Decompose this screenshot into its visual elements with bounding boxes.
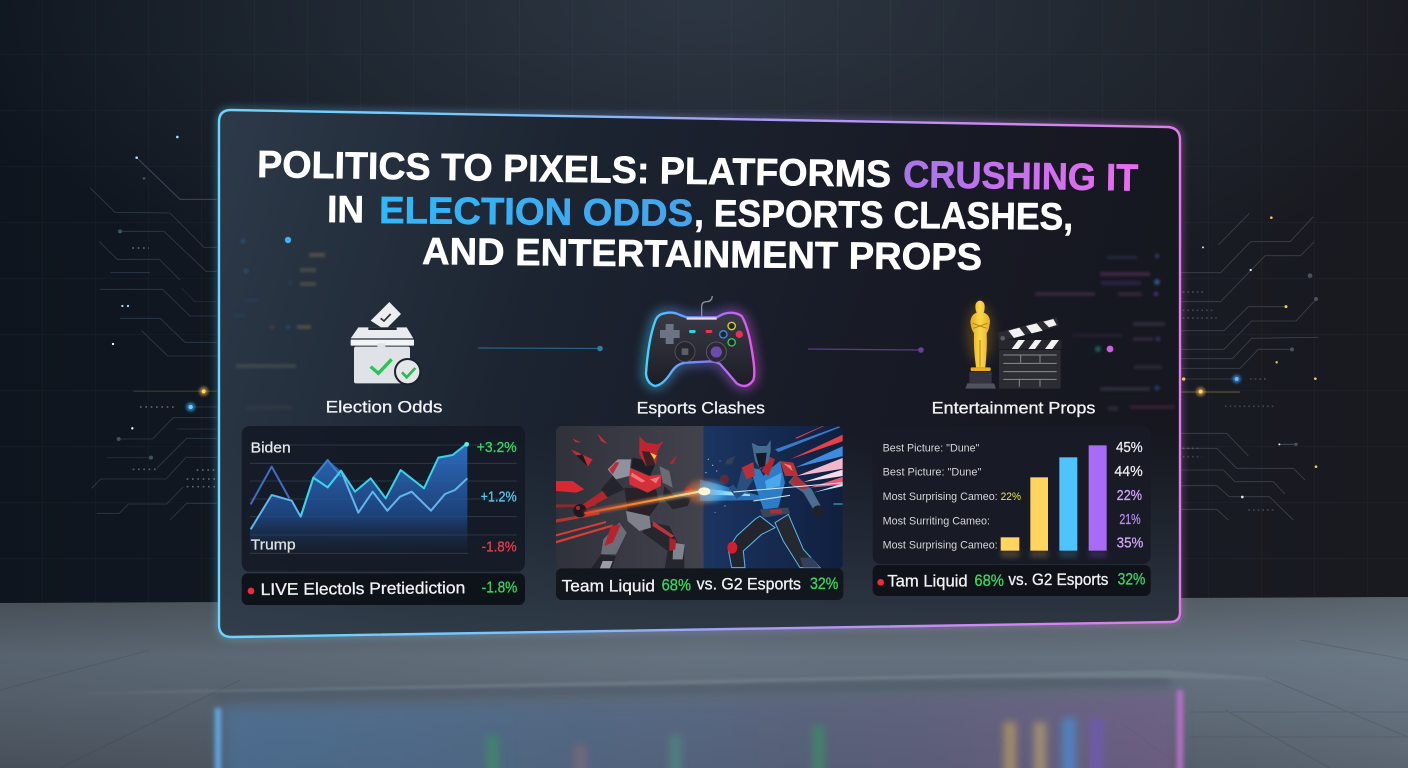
live prediction strip: LIVE Electols Pretiediction bbox=[261, 578, 465, 599]
title: AND ENTERTAINMENT PROPS bbox=[422, 231, 982, 279]
arrow: election to esports bbox=[478, 346, 603, 351]
matchup strip bbox=[873, 565, 1151, 596]
percent values: 44% bbox=[1114, 463, 1143, 480]
right circuit decoration bbox=[1181, 213, 1318, 520]
label: election odds: Election Odds bbox=[326, 397, 442, 416]
matchup strip: vs. G2 Esports bbox=[697, 575, 801, 594]
white trails over body bbox=[733, 483, 843, 501]
label: esports clashes: Esports Clashes bbox=[637, 398, 765, 417]
matchup strip bbox=[556, 568, 843, 600]
battle illustration bbox=[556, 426, 843, 571]
main glass panel bbox=[219, 110, 1180, 637]
line chart panel: -1.8% bbox=[482, 539, 517, 556]
percent values: 22% bbox=[1117, 487, 1142, 504]
row labels: Most Surprising Cameo: bbox=[883, 539, 998, 551]
label: entertainment props: Entertainment Props bbox=[932, 398, 1095, 417]
row labels: Most Surriting Cameo: bbox=[883, 515, 990, 527]
live prediction strip bbox=[242, 573, 525, 605]
pelvis bbox=[626, 511, 651, 531]
title bbox=[257, 144, 1138, 279]
belt bbox=[760, 508, 790, 518]
magenta and teal dots bbox=[1095, 346, 1113, 352]
left circuit decoration bbox=[90, 136, 217, 520]
row labels: Most Surprising Cameo: bbox=[883, 491, 998, 503]
icon: clapperboard bbox=[997, 317, 1062, 389]
line chart panel: +1.2% bbox=[481, 489, 517, 506]
speed trails bbox=[775, 426, 843, 505]
matchup strip: 68% bbox=[662, 576, 691, 595]
icon: ballot box bbox=[351, 302, 420, 384]
legs bbox=[728, 516, 775, 568]
blurred interior data, right bbox=[1035, 254, 1175, 411]
red fighter side bbox=[556, 433, 693, 571]
helmet bbox=[639, 436, 663, 466]
title: ELECTION ODDS bbox=[379, 190, 693, 235]
title: IN bbox=[327, 189, 364, 231]
row labels: Best Picture: "Dune" bbox=[883, 442, 980, 454]
panel glow bbox=[219, 110, 1180, 637]
blurred interior data, left bbox=[234, 238, 326, 368]
reflective floor bbox=[0, 597, 1408, 768]
blue fighter side bbox=[700, 426, 843, 568]
title: POLITICS TO PIXELS: PLATFORMS bbox=[257, 144, 891, 196]
percent changes: +3.2% bbox=[477, 439, 517, 456]
torso bbox=[750, 461, 785, 509]
row labels bbox=[883, 442, 1021, 551]
matchup strip: 68% bbox=[974, 571, 1004, 590]
column: entertainment props bbox=[873, 301, 1151, 596]
row labels: Best Picture: "Dune" bbox=[883, 466, 982, 478]
title: CRUSHING IT bbox=[903, 154, 1138, 200]
background wall bbox=[0, 0, 1408, 606]
candidate labels: Biden bbox=[251, 440, 291, 456]
right arm bbox=[788, 474, 822, 509]
legs bbox=[601, 523, 627, 554]
arrow: esports to entertainment bbox=[808, 347, 924, 353]
left arm bbox=[728, 469, 753, 499]
energy rays bbox=[700, 456, 767, 513]
row labels: 22% bbox=[1001, 491, 1021, 503]
matchup strip: 32% bbox=[1118, 569, 1145, 588]
title: , ESPORTS CLASHES, bbox=[694, 193, 1073, 239]
live prediction strip: -1.8% bbox=[482, 580, 518, 597]
bar chart panel bbox=[873, 426, 1151, 564]
head bbox=[752, 440, 771, 469]
chart lines bbox=[251, 442, 469, 529]
percent values: 45% bbox=[1116, 439, 1143, 456]
icon: game controller bbox=[646, 296, 754, 386]
panel neon border bbox=[219, 110, 1180, 637]
column: esports clashes bbox=[556, 296, 843, 600]
panel reflection bbox=[60, 670, 1290, 768]
column: election odds bbox=[242, 302, 525, 605]
matchup strip: 32% bbox=[810, 574, 838, 593]
matchup strip: Team Liquid bbox=[562, 577, 655, 596]
right arm bbox=[663, 486, 691, 509]
energy clash bbox=[584, 480, 725, 513]
panel body bbox=[219, 110, 1180, 637]
matchup strip: Tam Liquid bbox=[887, 572, 968, 591]
shoulders bbox=[608, 459, 631, 479]
percent values: 21% bbox=[1119, 511, 1141, 528]
line chart panel: Trump bbox=[251, 537, 296, 553]
line chart panel bbox=[242, 426, 525, 572]
chart area fill bbox=[250, 443, 467, 553]
fragments bbox=[556, 433, 678, 493]
left arm bbox=[601, 476, 624, 498]
torso bbox=[624, 488, 659, 516]
percent values: 35% bbox=[1117, 535, 1143, 552]
percent values bbox=[1114, 439, 1143, 552]
icon: golden statuette bbox=[965, 301, 996, 389]
interior blue dot bbox=[285, 237, 291, 243]
matchup strip: vs. G2 Esports bbox=[1008, 570, 1108, 589]
bars bbox=[1001, 445, 1107, 557]
red speed lines bbox=[556, 504, 613, 543]
